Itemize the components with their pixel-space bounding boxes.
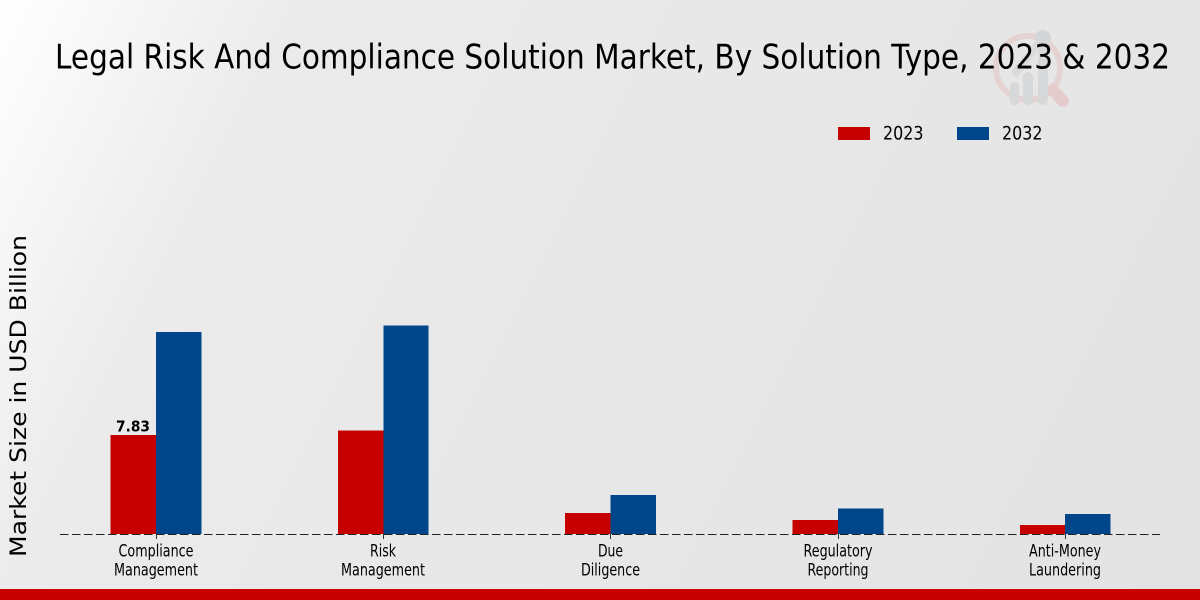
label: Due Diligence [581,542,640,580]
bars: Compliance Management [110,332,202,534]
label: Risk Management [341,542,425,580]
label: Compliance Management: Management [114,560,198,580]
footer bar [0,589,1200,600]
legend item: 2023 [838,124,924,144]
bars: Anti-Money Laundering [1020,514,1110,534]
y-axis label: Market Size in USD Billion [6,235,32,557]
label: Risk Management: Risk [370,542,396,562]
bars: Due Diligence [565,495,656,534]
label: Anti-Money Laundering: Anti-Money [1029,542,1101,562]
baseline axis [60,534,1160,536]
label: Regulatory Reporting: Reporting [808,560,868,580]
legend item: 2032 [957,124,1042,144]
x-axis category labels [114,534,1101,580]
label: Risk Management: Management [341,560,425,580]
bars: Risk Management [338,326,428,534]
label: Regulatory Reporting: Regulatory [804,542,872,562]
label: Due Diligence: Diligence [581,560,640,580]
label: Anti-Money Laundering [1029,542,1101,580]
value label: 7.83: 7.83 [116,418,150,436]
bar chart [60,326,1160,534]
legend item: 2032: 2032 [1002,124,1042,144]
legend [838,124,1042,144]
legend item: 2023: 2023 [883,124,924,144]
label: Regulatory Reporting [804,542,872,580]
tick marks [156,534,1066,539]
label: Anti-Money Laundering: Laundering [1029,560,1101,580]
bars: Regulatory Reporting [792,508,884,534]
label: Compliance Management: Compliance [118,542,194,562]
icon: watermark magnifier logo [996,30,1063,105]
label: Compliance Management [114,542,198,580]
label: Due Diligence: Due [598,542,623,562]
